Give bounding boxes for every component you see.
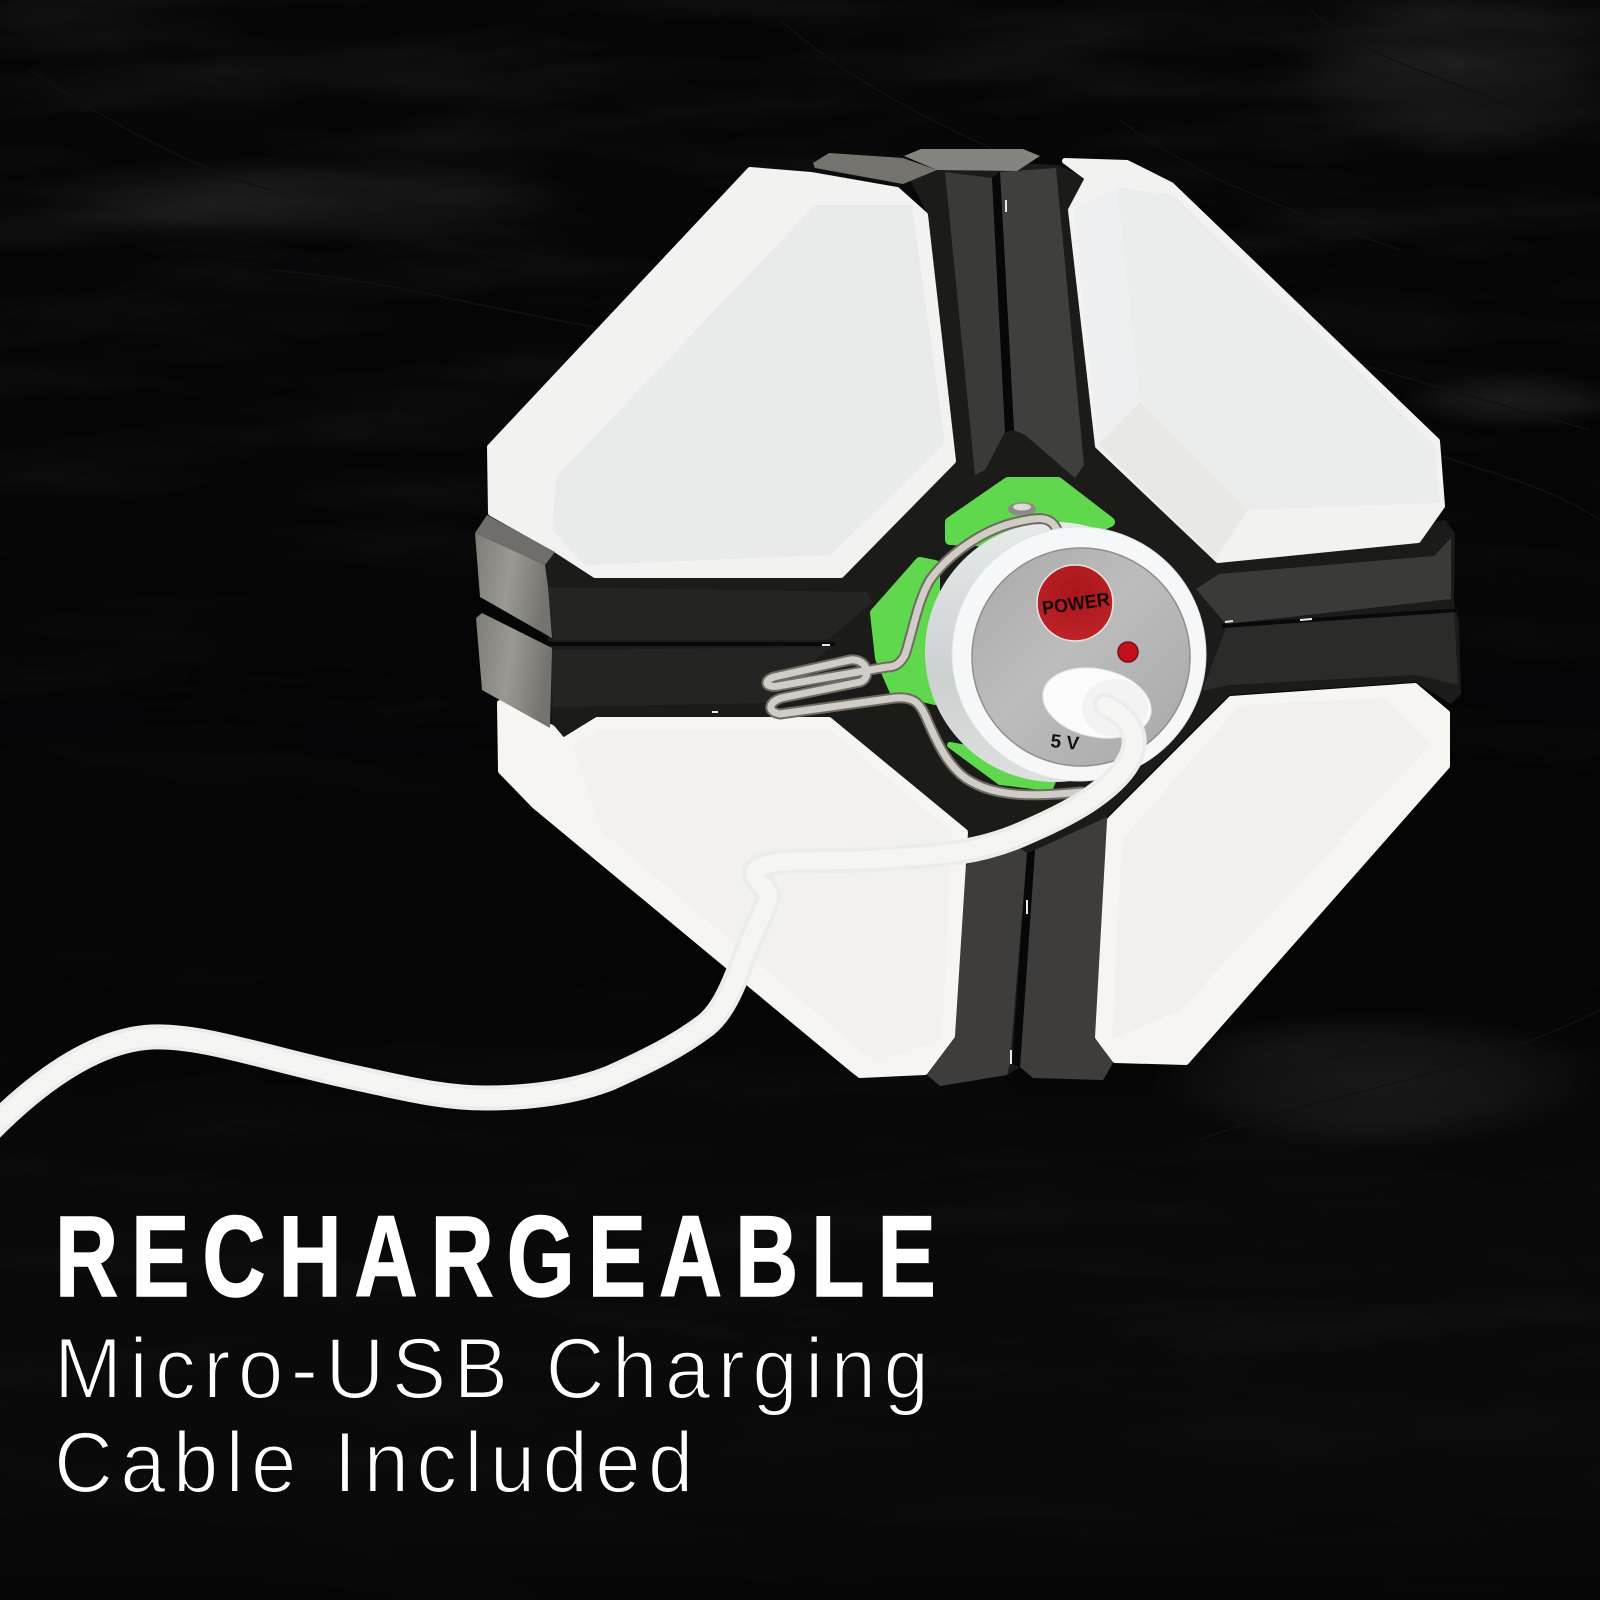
green core housing	[875, 482, 1110, 788]
power button: POWER	[1041, 589, 1111, 620]
charging cable	[0, 705, 1134, 1128]
silver face	[972, 548, 1190, 766]
control face	[952, 527, 1206, 781]
product: rechargeable lantern	[0, 149, 1461, 1128]
panel: top-left diffuser	[490, 170, 953, 575]
indicator LED	[1118, 642, 1138, 662]
subheading	[54, 1320, 929, 1510]
subheading line 1: Micro-USB Charging	[54, 1320, 929, 1416]
voltage label: 5 V	[1049, 731, 1080, 755]
wire hanger loop	[767, 519, 1082, 795]
panel: bottom-right diffuser	[1098, 686, 1447, 1062]
heading: rechargeable: RECHARGEABLE	[55, 1192, 936, 1321]
power button	[1037, 565, 1113, 641]
cylinder body	[925, 522, 1185, 782]
screw	[1008, 502, 1036, 516]
panel: top-right diffuser	[1065, 161, 1442, 560]
micro-usb plug	[1036, 658, 1158, 748]
dark rubber cross frame	[545, 160, 1461, 1086]
subheading line 2: Cable Included	[54, 1414, 693, 1510]
panel: bottom-left diffuser	[500, 703, 965, 1075]
white bezel	[952, 527, 1206, 781]
metal end caps	[475, 149, 1040, 728]
